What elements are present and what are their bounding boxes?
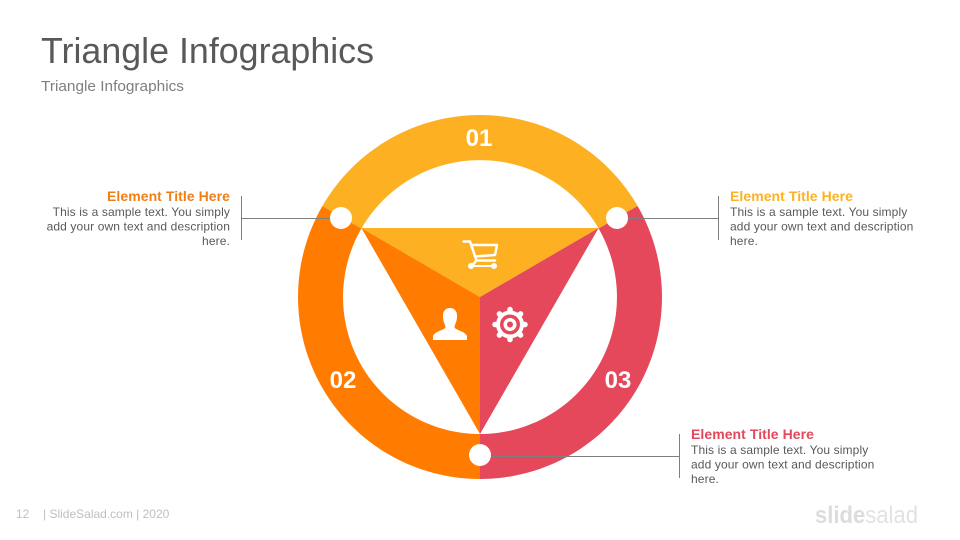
- icon: person: [433, 308, 467, 340]
- circular ring diagram: [298, 115, 662, 479]
- triangle segment: red: [480, 228, 599, 434]
- ring segment 02: [298, 206, 480, 479]
- marker dot: bottom: [469, 444, 491, 466]
- callout body: here.: [730, 234, 758, 248]
- callout body: This is a sample text. You simply: [691, 443, 868, 457]
- callout: left: [47, 188, 230, 248]
- callout body: add your own text and description: [47, 220, 230, 234]
- logo wordmark: slidesalad: [815, 502, 918, 529]
- number 01: 01: [466, 125, 492, 152]
- ring segment 03: [480, 206, 662, 479]
- icon: gear: [495, 310, 525, 340]
- callout: right: [730, 188, 913, 248]
- number 02: 02: [330, 367, 356, 394]
- leader line: left callout: [241, 196, 330, 240]
- callout body: add your own text and description: [730, 220, 913, 234]
- triangle segment: yellow: [361, 228, 599, 297]
- page number: 12: [16, 507, 30, 521]
- title: Triangle Infographics: [41, 30, 374, 71]
- leader line: bottom callout: [491, 434, 680, 478]
- callout body: This is a sample text. You simply: [730, 205, 907, 219]
- subtitle: Triangle Infographics: [41, 79, 184, 95]
- marker dot: right: [606, 207, 628, 229]
- footer text: | SlideSalad.com | 2020: [43, 507, 170, 521]
- callout body: here.: [691, 472, 719, 486]
- marker dot: left: [330, 207, 352, 229]
- callout: bottom: [691, 426, 874, 486]
- callout body: add your own text and description: [691, 458, 874, 472]
- callout title: Element Title Here: [107, 188, 230, 204]
- callout body: This is a sample text. You simply: [53, 205, 230, 219]
- triangle segment: orange: [361, 228, 480, 434]
- callout title: Element Title Here: [730, 188, 853, 204]
- callout title: Element Title Here: [691, 426, 814, 442]
- icon: shopping cart: [464, 242, 497, 268]
- number 03: 03: [605, 367, 631, 394]
- ring segment 01: [322, 115, 638, 228]
- leader line: right callout: [628, 196, 719, 240]
- callout body: here.: [202, 234, 230, 248]
